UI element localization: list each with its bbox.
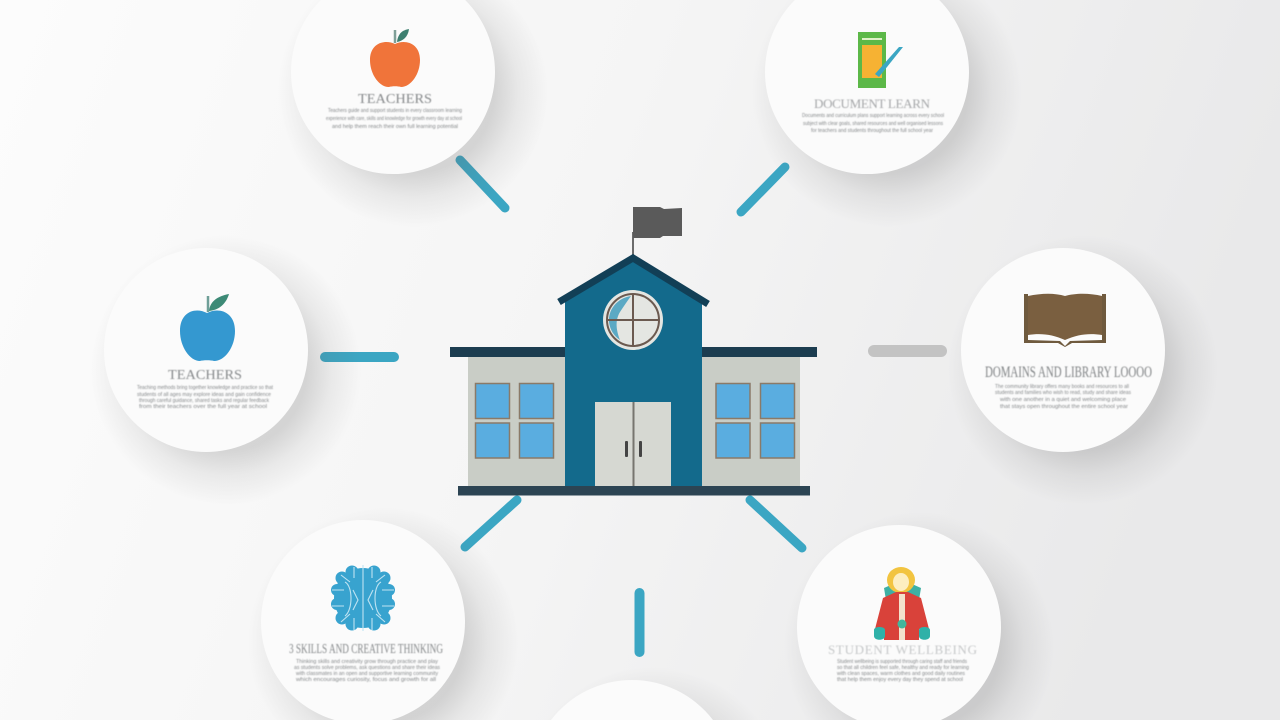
text block: Teachers guide and support students in every classroom learning — [328, 108, 462, 114]
text block — [995, 384, 1131, 410]
icon: open book — [1024, 294, 1106, 347]
heading: TEACHERS — [168, 368, 242, 383]
icon: student in red coat — [874, 567, 930, 640]
text block — [137, 385, 274, 410]
left wing — [468, 355, 566, 486]
text block: with classmates in an open and supportive learning community — [296, 671, 439, 677]
heading: STUDENT WELLBEING — [828, 642, 977, 657]
door — [595, 402, 671, 486]
base — [458, 486, 810, 496]
text block: Student wellbeing is supported through caring staff and friends — [837, 659, 967, 665]
right wing — [701, 355, 800, 486]
text block: Teaching methods bring together knowledge and practice so that — [137, 385, 274, 391]
panel: teaching — [91, 235, 361, 505]
text block: Thinking skills and creativity grow through practice and play — [296, 659, 439, 665]
text block — [837, 659, 969, 683]
text block: Documents and curriculum plans support learning across every school — [802, 113, 944, 119]
text block: The community library offers many books and resources to all — [995, 384, 1129, 390]
text block: through careful guidance, shared tasks and regular feedback — [139, 398, 269, 404]
text block: from their teachers over the full year at school — [139, 404, 267, 410]
heading: DOCUMENT LEARN — [814, 96, 931, 111]
text block — [802, 113, 944, 134]
gable roof — [559, 258, 708, 304]
panel: bottom centre circle — [517, 667, 787, 720]
icon: brain — [331, 565, 395, 631]
text block: that stays open throughout the entire school year — [1000, 404, 1128, 410]
icon: orange apple — [370, 29, 420, 87]
left wing roof — [450, 347, 566, 357]
connector: bottom — [634, 593, 644, 652]
text block: which encourages curiosity, focus and growth for all — [296, 677, 436, 683]
text block — [294, 659, 441, 683]
panel: curriculum — [752, 0, 1022, 227]
text block: experience with care, skills and knowledge for growth every day at school — [326, 116, 462, 122]
connector: top left — [460, 160, 505, 208]
text block: students of all ages may explore ideas and gain confidence — [137, 392, 271, 398]
text block: that help them enjoy every day they spend at school — [837, 677, 963, 683]
panel: student — [784, 512, 1054, 720]
text block — [326, 108, 462, 130]
flag — [632, 207, 682, 256]
panel: community library — [948, 235, 1218, 505]
text block: students and families who wish to read, study and share ideas — [995, 390, 1131, 396]
central school building — [450, 207, 817, 496]
text block: so that all children feel safe, healthy and ready for learning — [837, 665, 969, 671]
text block: for teachers and students throughout the full school year — [811, 128, 933, 134]
tower — [565, 260, 702, 487]
connector: left — [325, 352, 394, 362]
connector: top right — [741, 167, 785, 212]
icon: blue apple — [180, 294, 235, 361]
text block: with clean spaces, warm clothes and good daily routines — [837, 671, 966, 677]
left windows — [476, 384, 554, 458]
connector: bottom left — [465, 500, 517, 547]
heading: DOMAINS AND LIBRARY LOOOO — [985, 364, 1152, 381]
heading: 3 SKILLS AND CREATIVE THINKING — [289, 642, 443, 657]
text block: as students solve problems, ask questions and share their ideas — [294, 665, 441, 671]
text block: subject with clear goals, shared resources and well organised lessons — [803, 121, 943, 127]
right windows — [716, 384, 794, 458]
panel: brain and skills — [248, 507, 518, 720]
panel: teachers — [278, 0, 548, 227]
connector: right — [874, 345, 941, 357]
heading: TEACHERS — [358, 92, 432, 107]
right wing roof — [701, 347, 817, 357]
round window — [603, 290, 663, 350]
icon: tablet and pen — [858, 32, 903, 88]
text block: with one another in a quiet and welcoming place — [1000, 397, 1126, 403]
connector: bottom right — [750, 500, 802, 548]
text block: and help them reach their own full learning potential — [332, 124, 458, 130]
